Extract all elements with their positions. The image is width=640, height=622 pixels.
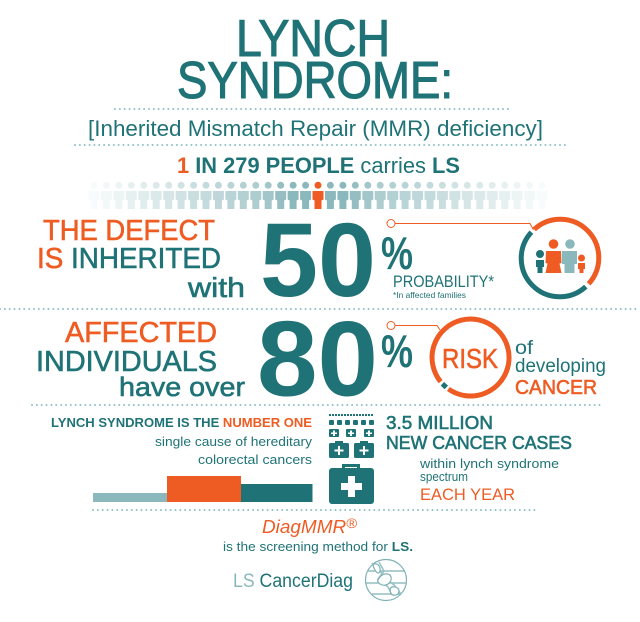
probability label: PROBABILITY*: [393, 273, 495, 291]
heading: affected individuals: INDIVIDUALS: [36, 346, 217, 378]
logo icon: [366, 560, 406, 600]
diagmmr text: ®: [346, 515, 358, 531]
cancer cases text: spectrum: [420, 469, 468, 484]
risk label: [515, 338, 606, 399]
heading: the defect is inherited: [37, 215, 245, 303]
icon: medical kits: [329, 415, 374, 504]
connector: probability: [387, 220, 534, 230]
risk label: developing: [515, 356, 606, 377]
diagmmr text: DiagMMR: [262, 517, 342, 537]
risk label: CANCER: [515, 377, 597, 399]
heading: affected individuals: [36, 317, 245, 402]
diagmmr text: [223, 515, 413, 554]
cancer cases text: NEW CANCER CASES: [386, 432, 572, 453]
cancer cases text: EACH YEAR: [420, 485, 515, 504]
prevalence statement: 1 IN 279 PEOPLE carries LS: [177, 153, 460, 178]
icon: family in ring: [521, 219, 599, 297]
heading: the defect is inherited: with: [187, 272, 245, 303]
probability label: *In affected families: [393, 290, 466, 300]
number one text: single cause of hereditary: [155, 434, 313, 449]
people row: [88, 182, 548, 209]
cancer cases text: 3.5 MILLION: [386, 412, 493, 433]
logo text: LS CancerDiag: [233, 571, 353, 592]
connector: risk: [387, 322, 440, 330]
title: [177, 10, 453, 110]
heading: the defect is inherited: IS INHERITED: [37, 243, 221, 275]
bar chart: [93, 476, 312, 502]
subtitle: [Inherited Mismatch Repair (MMR) deficiency]: [88, 116, 543, 141]
probability label: [393, 273, 495, 300]
heading: affected individuals: have over: [119, 372, 245, 402]
number one text: colorectal cancers: [198, 452, 313, 467]
cancer cases text: within lynch syndrome: [419, 456, 559, 471]
title: SYNDROME:: [177, 52, 453, 110]
heading: affected individuals: AFFECTED: [65, 317, 217, 349]
title: LYNCH: [236, 10, 390, 68]
number one text: LYNCH SYNDROME IS THE NUMBER ONE: [51, 415, 312, 430]
diagmmr text: is the screening method for LS.: [223, 539, 413, 554]
risk ring: RISK: [442, 343, 498, 374]
number one text: [51, 415, 313, 467]
stat: 80 percent: %: [381, 325, 413, 377]
cancer cases text: [386, 412, 572, 504]
stat: 50 percent: %: [381, 227, 413, 279]
stat: 50 percent: 50: [260, 202, 376, 319]
risk ring: [432, 319, 509, 396]
risk label: of: [515, 338, 534, 359]
heading: the defect is inherited: THE DEFECT: [43, 215, 215, 247]
stat: 80 percent: 80: [257, 298, 378, 418]
